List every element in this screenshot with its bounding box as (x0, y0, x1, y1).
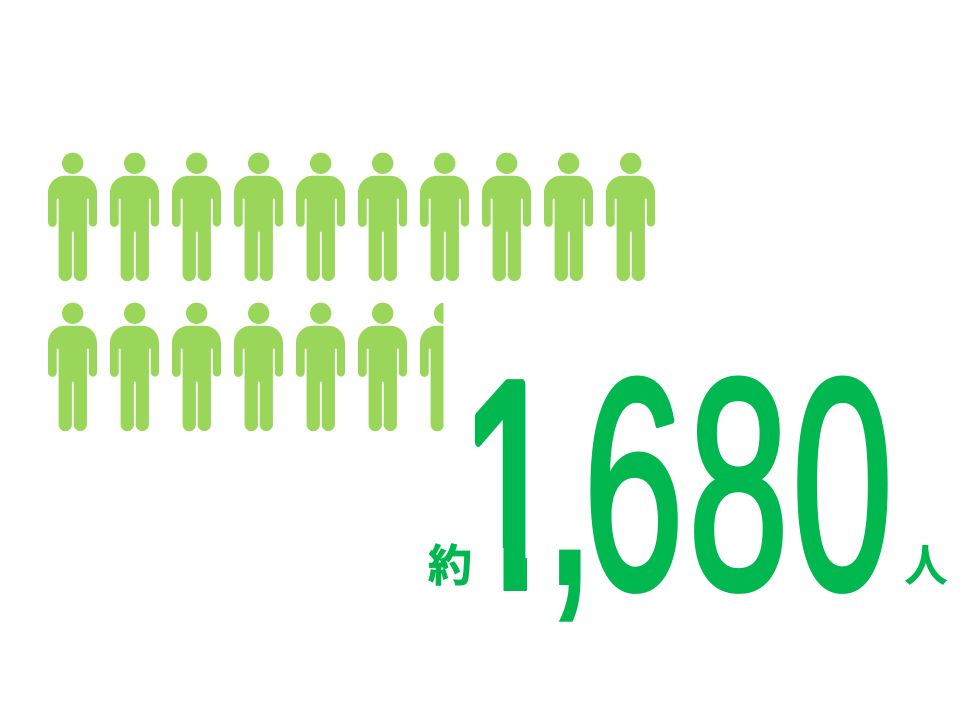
prefix: about: 約 (428, 542, 472, 591)
number: 1,680: 8 (688, 317, 789, 652)
pictogram: row 2 of people, last one partly cut (48, 303, 469, 431)
number: 1,680: 1 (461, 323, 561, 648)
number: 1,680: 0 (792, 317, 893, 652)
number: 1,680: , (548, 372, 591, 636)
suffix: people: 人 (904, 542, 948, 591)
headline figure: about 1,680 people (428, 317, 948, 652)
number: 1,680: 6 (583, 317, 684, 652)
number: 1,680 (461, 317, 893, 652)
pictogram: row 1 of ten people (48, 153, 655, 281)
